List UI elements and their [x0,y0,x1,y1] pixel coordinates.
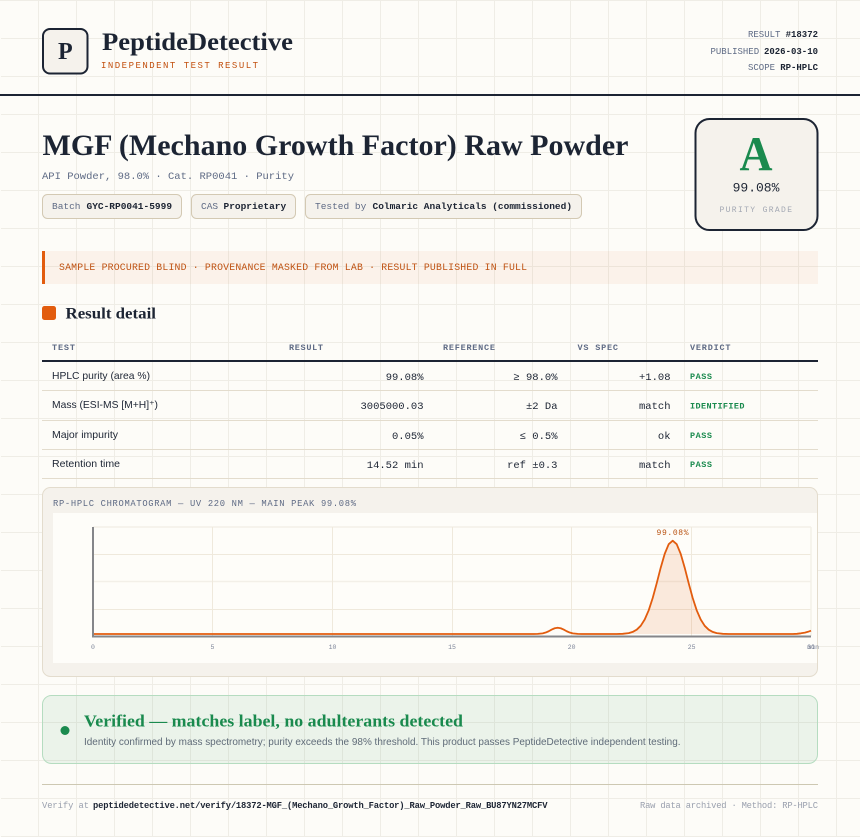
chips [42,194,582,218]
table header: VS SPEC [578,343,618,353]
row: major impurity: Major impurity [52,429,119,441]
row: retention time: PASS [690,460,712,470]
header [43,27,819,74]
peak label: 99.08% [656,529,689,538]
row: major impurity: ok [658,431,670,443]
chip: batch: Batch [52,201,81,212]
chromatogram trace [93,541,811,634]
row: mass: Mass (ESI-MS [M+H]⁺) [52,399,158,411]
table header: TEST [52,343,75,353]
verified callout [42,696,818,764]
row: HPLC purity: 99.08% [386,372,424,384]
chip: CAS: Proprietary [224,201,287,212]
row: mass: 3005000.03 [360,401,424,413]
row: HPLC purity: ≥ 98.0% [513,372,558,384]
table header [42,343,818,362]
chip: CAS [192,194,296,218]
verify link: peptidedetective.net/verify/18372-MGF_(Mechano_Growth_Factor)_Raw_Powder_Raw_BU87YN27MCFV [93,801,548,811]
row: retention time: 14.52 min [367,460,424,472]
x axis ticks: 20 [568,644,576,651]
product title: MGF (Mechano Growth Factor) Raw Powder [42,129,628,162]
result meta: RP-HPLC [780,63,819,73]
grade letter: A [740,126,773,181]
x axis ticks [91,644,819,651]
result meta: SCOPE [748,63,775,73]
row: retention time: match [639,460,670,472]
table header: RESULT [289,343,323,353]
x axis ticks: 25 [688,644,696,651]
status dot [60,726,70,735]
chip: tested by: Colmaric Analyticals (commissioned) [372,201,572,212]
row: major impurity: PASS [690,431,712,441]
verified heading: Verified — matches label, no adulterants detected [84,712,464,731]
x axis ticks: min [807,644,819,651]
result table [42,343,818,479]
chip: tested by: Tested by [315,201,367,212]
row: major impurity: ≤ 0.5% [520,431,558,443]
axes [93,527,811,636]
row: HPLC purity: PASS [690,372,712,382]
row: HPLC purity: HPLC purity (area %) [52,370,150,382]
x axis ticks: 0 [91,644,95,651]
result meta: 2026-03-10 [764,47,818,57]
product subtitle: API Powder, 98.0% · Cat. RP0041 · Purity [42,171,294,183]
row: retention time: Retention time [52,458,120,470]
row: mass [52,399,744,413]
chip: tested by [306,194,582,218]
footer [42,801,818,811]
grade card [696,119,818,230]
row: HPLC purity [52,370,712,384]
brand name: PeptideDetective [102,27,293,56]
x axis ticks: 10 [329,644,336,651]
chart title: RP-HPLC CHROMATOGRAM — UV 220 NM — MAIN PEAK 99.08% [53,499,357,509]
row: mass: ±2 Da [526,401,558,413]
verify link: Verify at [42,801,89,811]
row: HPLC purity: +1.08 [639,372,670,384]
result meta: RESULT [748,30,781,40]
row: retention time [52,458,712,472]
verified text: Identity confirmed by mass spectrometry; purity exceeds the 98% threshold. This product passes PeptideDetective independent testing. [84,737,680,748]
table header: REFERENCE [443,343,495,353]
grade label: PURITY GRADE [720,206,792,215]
row: major impurity: 0.05% [392,431,424,443]
archive note: Raw data archived · Method: RP-HPLC [640,801,818,811]
blind sample banner: SAMPLE PROCURED BLIND · PROVENANCE MASKED FROM LAB · RESULT PUBLISHED IN FULL [59,262,527,273]
row: mass: IDENTIFIED [690,402,744,412]
result meta: #18372 [786,30,818,40]
x axis ticks: 30 [807,644,815,651]
row: mass: match [639,401,670,413]
logo mark [43,29,88,74]
logo mark: P [58,39,73,65]
x axis ticks: 15 [448,644,456,651]
section heading: Result detail [66,306,157,323]
chromatogram panel [42,488,819,676]
row: retention time: ref ±0.3 [507,460,558,472]
table header: VERDICT [690,343,730,353]
row: major impurity [52,429,712,443]
x axis ticks: 5 [211,644,215,651]
tagline: INDEPENDENT TEST RESULT [101,61,259,71]
peak area fill [617,541,729,634]
blind sample banner [42,251,818,284]
chip: CAS: CAS [201,201,218,212]
chip: batch: GYC-RP0041-5999 [86,201,172,212]
chart [53,513,819,663]
result meta [710,30,819,73]
result meta: PUBLISHED [710,47,759,57]
chip: batch [42,194,182,218]
purity value: 99.08% [733,180,780,196]
